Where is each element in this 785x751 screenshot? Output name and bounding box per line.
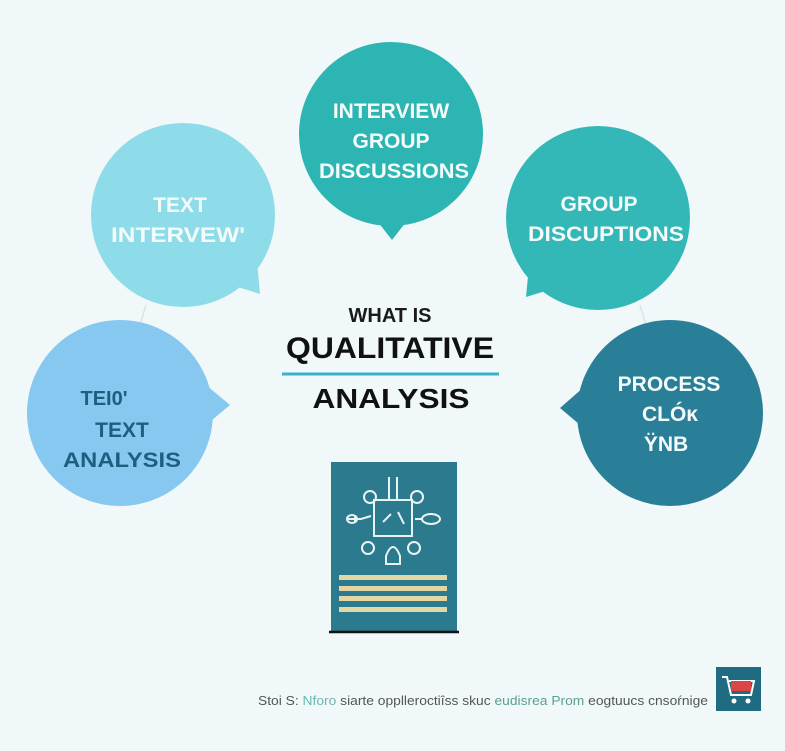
bubble: text analysis	[27, 320, 230, 506]
icon: document	[329, 462, 459, 632]
bubble: interview group discussions: DISCUSSIONS	[319, 160, 469, 183]
bubble: text analysis: TEI0'	[80, 388, 128, 410]
bubble: process: ŸNB	[644, 433, 688, 456]
bubble: text interview	[91, 123, 275, 307]
bubble: text interview: INTERVEW'	[111, 224, 245, 247]
bubble: text interview: TEXT	[153, 194, 207, 217]
bubble: text analysis: TEXT	[95, 419, 149, 442]
bubble: group discuptions: GROUP	[560, 193, 638, 216]
bubble: interview group discussions	[299, 42, 483, 240]
icon: cart	[716, 667, 761, 711]
footer text: Stoi S: Nforo siarte opplleroctiîss skuc eudisrea Prom eogtuucs cnsoŕnige	[258, 694, 708, 708]
title: WHAT IS	[349, 305, 431, 327]
title: ANALYSIS	[312, 383, 470, 414]
bubble: process: CLÓĸ	[642, 402, 698, 426]
bubble: interview group discussions: INTERVIEW	[333, 100, 449, 123]
bubble: group discuptions	[506, 126, 690, 310]
bubble: group discuptions: DISCUPTIONS	[528, 223, 684, 246]
bubble: process: PROCESS	[618, 373, 720, 396]
title	[282, 305, 499, 414]
bubble: process	[560, 320, 763, 506]
bubble: text analysis: ANALYSIS	[63, 449, 181, 472]
title: QUALITATIVE	[286, 332, 494, 365]
bubble: interview group discussions: GROUP	[352, 130, 430, 153]
